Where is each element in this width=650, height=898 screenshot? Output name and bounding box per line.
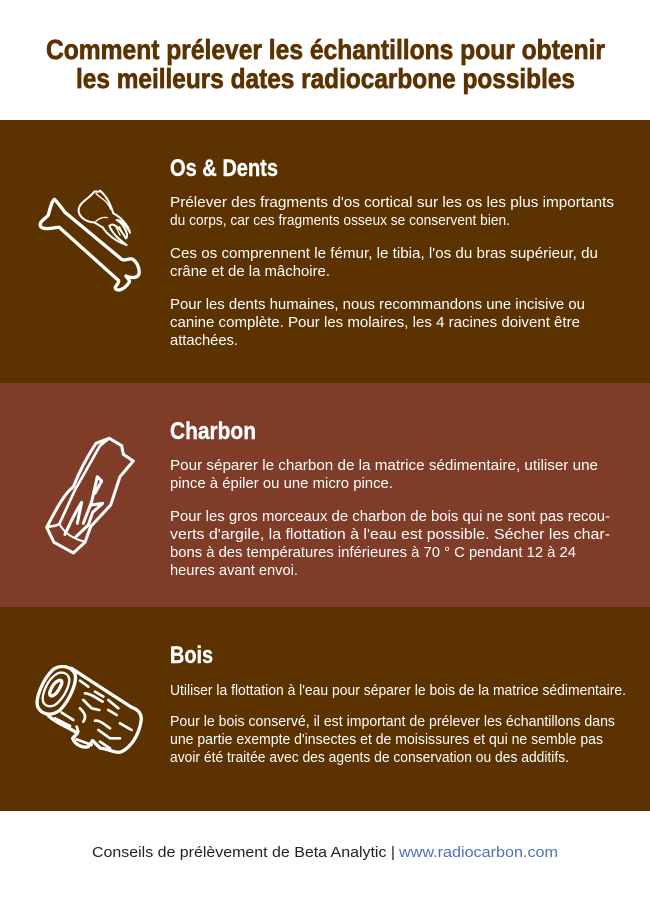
text: os et dents: canine complète. Pour les molaires, les 4 racines doivent être (170, 315, 580, 331)
panel: charbon (0, 383, 650, 607)
panel: os et dents (0, 120, 650, 383)
text: os et dents: Pour les dents humaines, nous recommandons une incisive ou (170, 297, 585, 313)
text: os et dents: crâne et de la mâchoire. (170, 264, 330, 280)
icon: log (37, 667, 141, 752)
footer (92, 844, 558, 861)
text: charbon: bons à des températures inférieures à 70 ° C pendant 12 à 24 (170, 545, 576, 561)
footer: www.radiocarbon.com (398, 844, 558, 861)
heading: charbon: Charbon (170, 418, 256, 445)
text: charbon: heures avant envoi. (170, 563, 298, 579)
title: les meilleurs dates radiocarbone possibles (76, 63, 575, 94)
text: charbon (170, 458, 610, 579)
text: os et dents: Ces os comprennent le fémur, le tibia, l'os du bras supérieur, du (170, 246, 598, 262)
text: charbon: Pour les gros morceaux de charbon de bois qui ne sont pas recou- (170, 509, 610, 525)
text: os et dents (170, 195, 614, 349)
text: charbon: pince à épiler ou une micro pince. (170, 476, 393, 492)
text: charbon: verts d'argile, la flottation à l'eau est possible. Sécher les char- (170, 527, 610, 543)
icon: bone and tooth (40, 191, 139, 290)
heading: bois: Bois (170, 642, 213, 669)
text: os et dents: attachées. (170, 333, 238, 349)
text: bois (170, 683, 626, 766)
footer: Conseils de prélèvement de Beta Analytic | (92, 844, 395, 861)
text: charbon: Pour séparer le charbon de la matrice sédimentaire, utiliser une (170, 458, 598, 474)
text: bois: Pour le bois conservé, il est important de prélever les échantillons dans (170, 714, 615, 730)
text: os et dents: du corps, car ces fragments osseux se conservent bien. (170, 213, 510, 229)
heading: os et dents: Os & Dents (170, 155, 278, 182)
text: os et dents: Prélever des fragments d'os cortical sur les os les plus importants (170, 195, 614, 211)
text: bois: une partie exempte d'insectes et de moisissures et qui ne semble pas (170, 732, 603, 748)
text: bois: Utiliser la flottation à l'eau pour séparer le bois de la matrice sédimentaire. (170, 683, 626, 699)
icon: charcoal (47, 438, 133, 553)
panel: bois (0, 607, 650, 811)
title (46, 34, 605, 94)
text: bois: avoir été traitée avec des agents de conservation ou des additifs. (170, 750, 569, 766)
